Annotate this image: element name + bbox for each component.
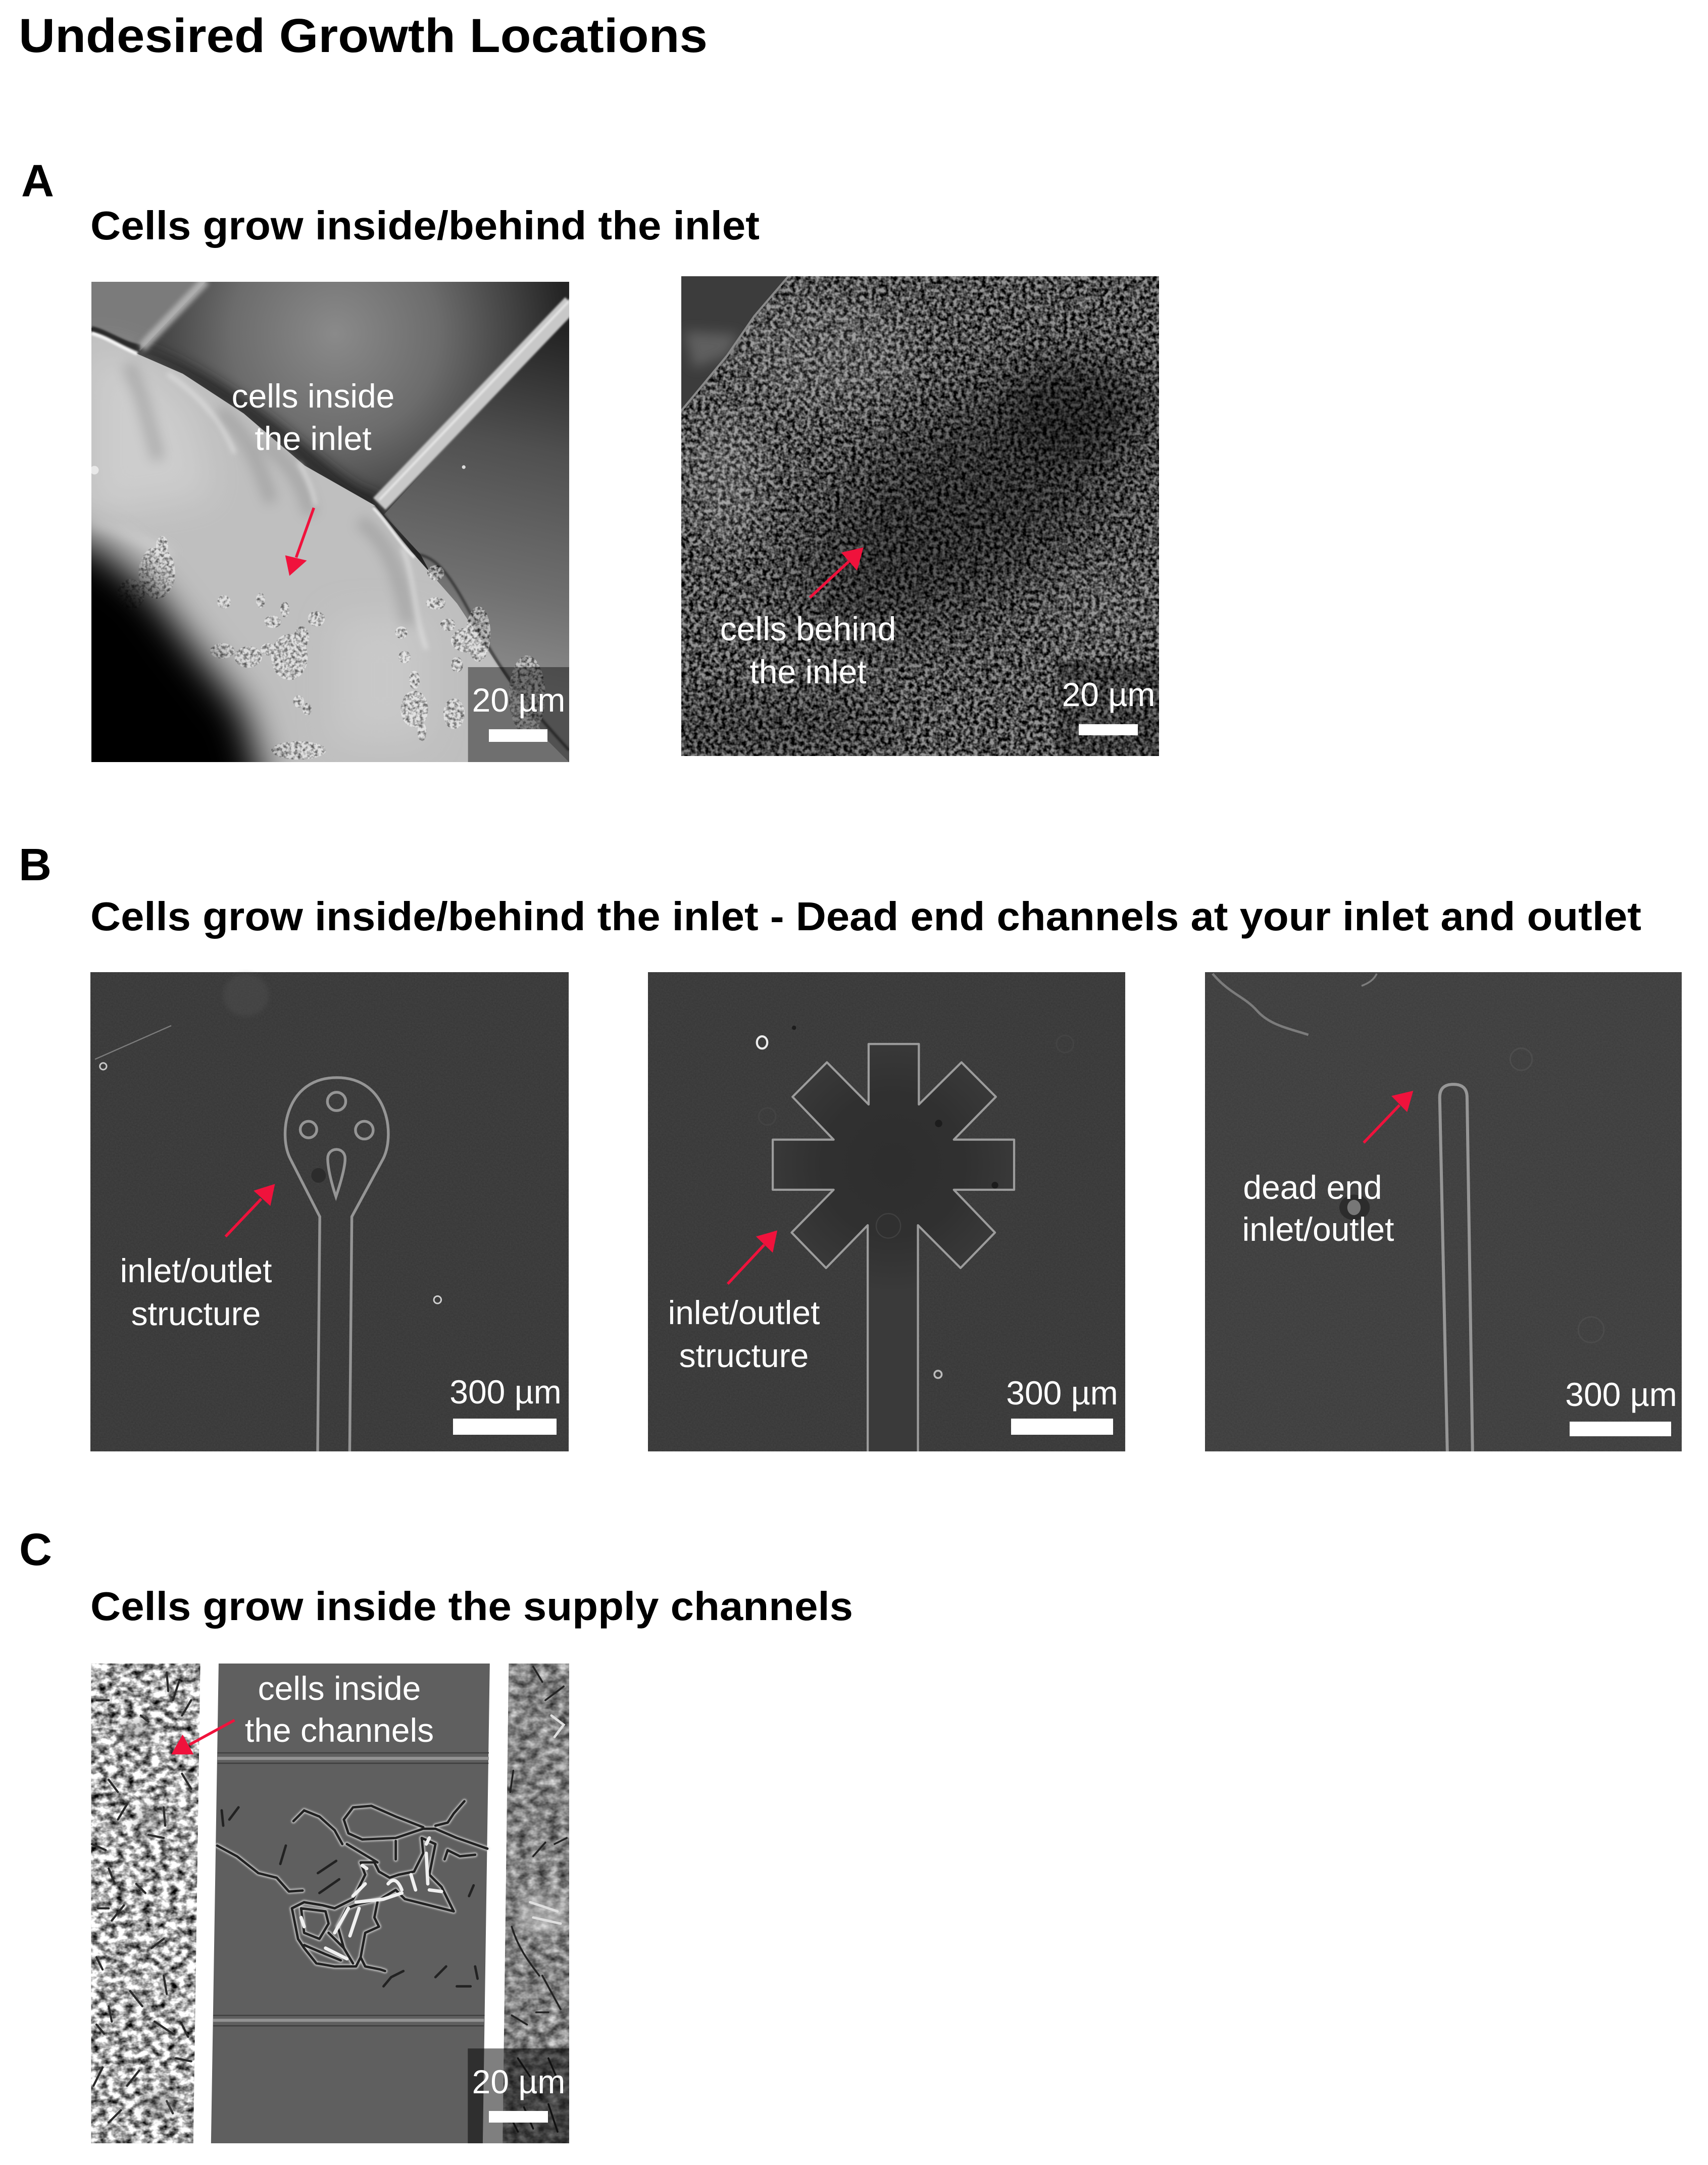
micrograph: cells behind the inlet (681, 276, 1159, 756)
label: inlet/outlet (120, 1252, 272, 1289)
arrow (1364, 1091, 1413, 1143)
arrow (810, 547, 864, 597)
label: cells inside (232, 377, 394, 415)
cell cluster (217, 1801, 487, 1986)
label: the channels (245, 1711, 434, 1749)
right strip (501, 1664, 570, 2143)
scale bar (489, 729, 547, 742)
label (720, 610, 896, 690)
scale label: 300 µm (1565, 1376, 1677, 1413)
scale bar (1570, 1422, 1671, 1436)
label: the inlet (749, 653, 867, 690)
scale bar (489, 2111, 548, 2123)
arrow (171, 1720, 234, 1754)
panel letter B: B (19, 840, 52, 890)
label: inlet/outlet (668, 1294, 820, 1331)
label: structure (679, 1337, 809, 1374)
channel structure (773, 1044, 1014, 1451)
micrograph: cells inside the inlet (91, 282, 569, 762)
scale label: 300 µm (449, 1373, 562, 1411)
label: inlet/outlet (1242, 1211, 1394, 1248)
label (120, 1252, 272, 1332)
panel letter A: A (21, 156, 54, 207)
heading C: Cells grow inside the supply channels (90, 1584, 853, 1629)
scale box (468, 667, 569, 762)
panel letter C: C (19, 1525, 52, 1575)
title: Undesired Growth Locations (19, 9, 708, 63)
label (232, 377, 394, 457)
scale box (468, 2048, 569, 2143)
label (245, 1670, 434, 1749)
label: cells inside (258, 1670, 421, 1707)
label: cells behind (720, 610, 896, 647)
label: dead end (1243, 1169, 1382, 1206)
label: the inlet (255, 420, 372, 457)
scale box (1058, 663, 1159, 756)
micrograph: star inlet structure (648, 972, 1125, 1451)
scale label: 20 µm (472, 2063, 565, 2100)
central channel (211, 1664, 490, 2143)
micrograph: cells inside the supply channels (91, 1664, 570, 2143)
scale label: 20 µm (1062, 676, 1155, 713)
label (668, 1294, 820, 1374)
micrograph: teardrop inlet structure (90, 972, 569, 1451)
channel structure (285, 1078, 388, 1451)
label (1242, 1169, 1394, 1248)
scale label: 300 µm (1006, 1374, 1118, 1412)
arrow (226, 1184, 275, 1236)
scale bar (453, 1419, 557, 1435)
heading B: Cells grow inside/behind the inlet - Dead end channels at your inlet and outlet (90, 894, 1641, 939)
heading A: Cells grow inside/behind the inlet (90, 203, 760, 248)
scale label: 20 µm (472, 681, 565, 719)
channel structure (1440, 1084, 1473, 1451)
arrow (285, 508, 314, 576)
scale bar (1079, 724, 1138, 735)
arrow (728, 1230, 777, 1284)
label: structure (131, 1295, 261, 1332)
scale bar (1011, 1419, 1113, 1435)
micrograph: dead end channel (1205, 972, 1682, 1451)
left strip (91, 1664, 201, 2143)
